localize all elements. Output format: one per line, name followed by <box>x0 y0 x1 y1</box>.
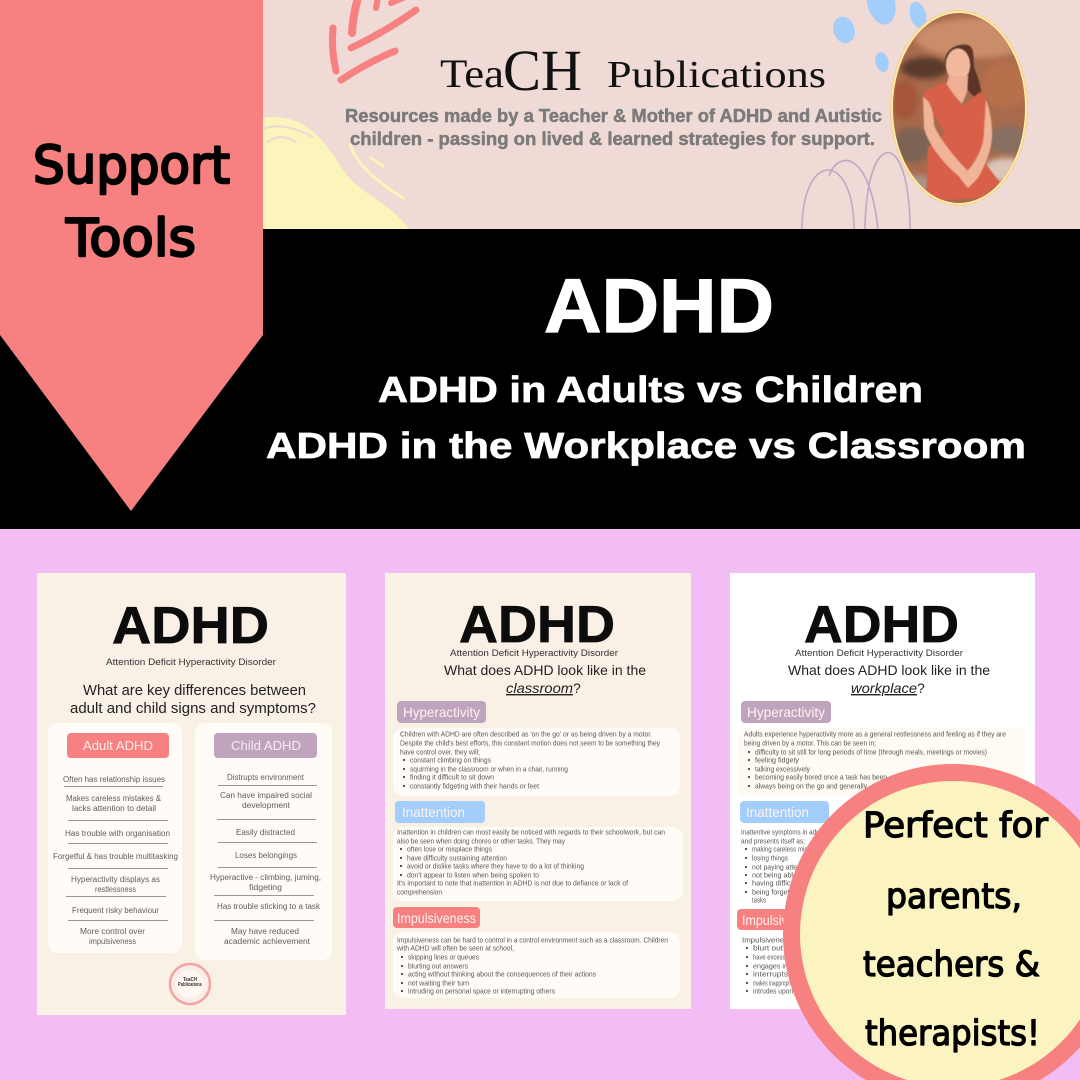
section: hyperactivity: Hyperactivity <box>747 704 825 720</box>
column: adult ADHD: Often has relationship issues <box>63 775 165 784</box>
photo: author portrait <box>890 10 1028 206</box>
section: inattention: comprehension <box>397 888 442 896</box>
section: hyperactivity: difficulty to sit still for long periods of time (through meals, meetings or movies) <box>755 748 987 756</box>
panel: adult vs child poster <box>37 573 346 1015</box>
poster heading: What does ADHD look like in the <box>444 662 646 678</box>
column: adult ADHD: impulsiveness <box>89 937 136 946</box>
column: adult ADHD: Has trouble with organisation <box>65 829 170 838</box>
section: inattention: often lose or misplace things <box>407 844 492 854</box>
section: impulsiveness <box>737 909 827 996</box>
section: hyperactivity: Hyperactivity <box>403 704 480 720</box>
section: impulsiveness: Impulsiveness can be hard to control in a control environment such as a classroom. Children <box>397 936 668 944</box>
section: inattention: not paying attention <box>752 862 812 872</box>
section: inattention: avoid or dislike tasks where they have to do a lot of thinking <box>407 862 584 870</box>
section: impulsiveness: skipping lines or queues <box>408 952 479 962</box>
tagline <box>345 105 882 149</box>
poster heading: Attention Deficit Hyperactivity Disorder <box>450 648 618 659</box>
poster heading: What does ADHD look like in the <box>788 662 990 678</box>
poster heading: Attention Deficit Hyperactivity Disorder <box>795 648 963 659</box>
column: child ADHD: Loses belongings <box>235 851 297 860</box>
decoration: blue drops <box>830 0 929 73</box>
brand name: Publications <box>607 54 826 96</box>
column: adult ADHD: Makes careless mistakes & <box>66 794 162 803</box>
poster heading: Attention Deficit Hyperactivity Disorder <box>106 657 276 667</box>
tagline: Resources made by a Teacher & Mother of ADHD and Autistic <box>345 105 882 126</box>
section: hyperactivity: feeling fidgety <box>755 756 799 764</box>
section: impulsiveness: acting without thinking about the consequences of their actions <box>408 970 596 978</box>
poster heading: What are key differences between <box>83 683 306 699</box>
section: inattention: Inattention <box>402 804 465 820</box>
callout: perfect for parents, teachers and therapists: Perfect for <box>863 806 1049 846</box>
section: hyperactivity <box>738 701 1025 796</box>
poster heading: adult and child signs and symptoms? <box>70 701 316 717</box>
dress <box>923 82 1000 201</box>
section: hyperactivity: squirming in the classroom or when in a chair, running <box>410 764 568 774</box>
section: inattention: Inattention in children can most easily be noticed with regards to their schoolwork, but can <box>397 828 665 836</box>
section: impulsiveness: Impulsiveness <box>397 910 476 926</box>
logo: TeaCH Publications stamp: TeaCH <box>183 977 197 983</box>
column: adult ADHD <box>48 723 182 953</box>
callout: perfect for parents, teachers and therapists <box>792 772 1080 1080</box>
column: child ADHD: development <box>242 801 291 810</box>
section: inattention <box>740 801 829 904</box>
panel: support tools ribbon <box>0 0 263 511</box>
section: hyperactivity: constantly fidgeting with their hands or feet <box>410 782 539 790</box>
column: adult ADHD: Forgetful & has trouble multitasking <box>53 852 178 861</box>
face <box>946 48 970 82</box>
title <box>266 264 1026 466</box>
logo: TeaCH Publications stamp: Publications <box>178 982 202 988</box>
section: inattention: Inattentive symptoms in adults <box>741 828 826 836</box>
section: hyperactivity: have control over, they will; <box>400 748 480 756</box>
section: inattention: being forgetful <box>752 888 797 896</box>
section: impulsiveness: Impulsiveness <box>742 912 821 928</box>
section: impulsiveness: makes inappropriate <box>753 978 798 988</box>
column: adult ADHD: Frequent risky behaviour <box>72 906 159 915</box>
column: child ADHD: Easily distracted <box>236 828 295 837</box>
section: hyperactivity <box>393 701 680 796</box>
decoration: lilac arches <box>802 153 910 230</box>
section: inattention: not being able <box>752 870 797 880</box>
panel: classroom poster <box>385 573 691 1009</box>
brand name: CH <box>503 38 582 103</box>
section: inattention: also be seen when doing chores or other tasks. They may <box>397 836 565 846</box>
poster heading: classroom <box>506 680 573 696</box>
section: inattention: Inattention <box>746 804 809 820</box>
ribbon heading: Tools <box>65 209 196 269</box>
section: inattention: and presents itself as; <box>741 836 805 846</box>
column: child ADHD: academic achievement <box>224 937 311 946</box>
column: child ADHD: May have reduced <box>231 927 299 936</box>
section: inattention: have difficulty sustaining attention <box>407 854 507 862</box>
column: child ADHD: Can have impaired social <box>220 791 312 800</box>
section: inattention <box>393 801 683 901</box>
section: impulsiveness <box>393 907 680 998</box>
callout: perfect for parents, teachers and therapists: therapists! <box>865 1014 1040 1054</box>
section: hyperactivity: constant climbing on things <box>410 756 491 764</box>
section: impulsiveness: engages in <box>753 962 788 970</box>
ribbon heading <box>33 136 230 269</box>
section: hyperactivity: being driven by a motor. This can be seen in; <box>744 738 876 748</box>
ribbon heading: Support <box>33 136 230 196</box>
decoration: yellow blob <box>263 117 410 230</box>
poster heading: ADHD <box>112 597 269 655</box>
column: adult ADHD: Hyperactivity displays as <box>71 875 160 884</box>
section: hyperactivity: Despite the child's best efforts, this constant motion does not seem to be something they <box>400 738 660 748</box>
callout: perfect for parents, teachers and therapists: teachers & <box>863 945 1040 985</box>
column: child ADHD <box>195 723 332 960</box>
title: ADHD <box>544 264 774 349</box>
callout: perfect for parents, teachers and therapists: parents, <box>886 877 1022 917</box>
section: hyperactivity: finding it difficult to sit down <box>410 772 494 782</box>
poster heading: workplace <box>851 680 917 696</box>
black title band <box>0 229 1080 529</box>
logo: TeaCH Publications stamp <box>170 964 210 1004</box>
section: hyperactivity: Children with ADHD are often described as 'on the go' or as being driven by a motor. <box>400 730 652 738</box>
poster heading <box>788 596 990 696</box>
section: impulsiveness: intrudes upon <box>753 986 793 996</box>
section: impulsiveness: blurting out answers <box>408 962 468 970</box>
arms <box>923 97 967 178</box>
section: inattention: It's important to note that inattention in ADHD is not due to defiance or lack of <box>397 878 629 888</box>
column: adult ADHD: Adult ADHD <box>83 739 153 753</box>
poster heading <box>444 596 646 696</box>
section: impulsiveness: have excessive <box>753 952 793 962</box>
section: impulsiveness: blurt out <box>753 944 783 952</box>
poster heading: ? <box>917 680 925 696</box>
decoration: coral leaf strokes <box>332 0 416 80</box>
hair <box>945 45 981 101</box>
section: impulsiveness: interrupts <box>753 970 788 978</box>
section: inattention: don't appear to listen when being spoken to <box>407 870 539 880</box>
section: impulsiveness: Impulsiveness <box>742 936 792 944</box>
section: hyperactivity: becoming easily bored once a task has been <box>755 772 887 782</box>
column: adult ADHD: lacks attention to detail <box>72 804 156 813</box>
section: inattention: losing things <box>752 854 788 862</box>
title: ADHD in Adults vs Children <box>378 369 923 410</box>
section: impulsiveness: intruding on personal space or interrupting others <box>408 986 555 996</box>
column: child ADHD: Has trouble sticking to a task <box>217 902 320 911</box>
column: child ADHD: fidgeting <box>249 883 282 892</box>
section: impulsiveness: with ADHD will often be seen at school, <box>396 944 514 952</box>
column: adult ADHD: restlessness <box>95 885 136 894</box>
column: child ADHD: Child ADHD <box>231 739 301 753</box>
poster heading: ? <box>573 680 581 696</box>
column: adult ADHD: More control over <box>80 927 145 936</box>
section: impulsiveness: not waiting their turn <box>408 978 469 988</box>
poster heading <box>70 597 316 717</box>
section: hyperactivity: always being on the go and generally <box>755 782 867 790</box>
column: child ADHD: Hyperactive - climbing, juming, <box>210 873 321 882</box>
poster heading: ADHD <box>804 596 959 654</box>
section: inattention: making careless mistakes <box>752 844 822 854</box>
brand name <box>440 38 826 103</box>
poster heading: ADHD <box>459 596 615 654</box>
tagline: children - passing on lived & learned strategies for support. <box>350 128 875 149</box>
section: hyperactivity: Adults experience hyperactivity more as a general restlessness and feeling as if they are <box>744 730 1006 738</box>
panel: workplace poster <box>730 573 1035 1009</box>
title: ADHD in the Workplace vs Classroom <box>266 425 1026 466</box>
column: child ADHD: Distrupts environment <box>227 773 305 782</box>
section: hyperactivity: talking excessively <box>755 764 810 774</box>
section: inattention: tasks <box>752 896 766 904</box>
header banner <box>263 0 1080 230</box>
brand name: Tea <box>440 51 504 96</box>
section: inattention: having difficulty <box>752 878 802 888</box>
